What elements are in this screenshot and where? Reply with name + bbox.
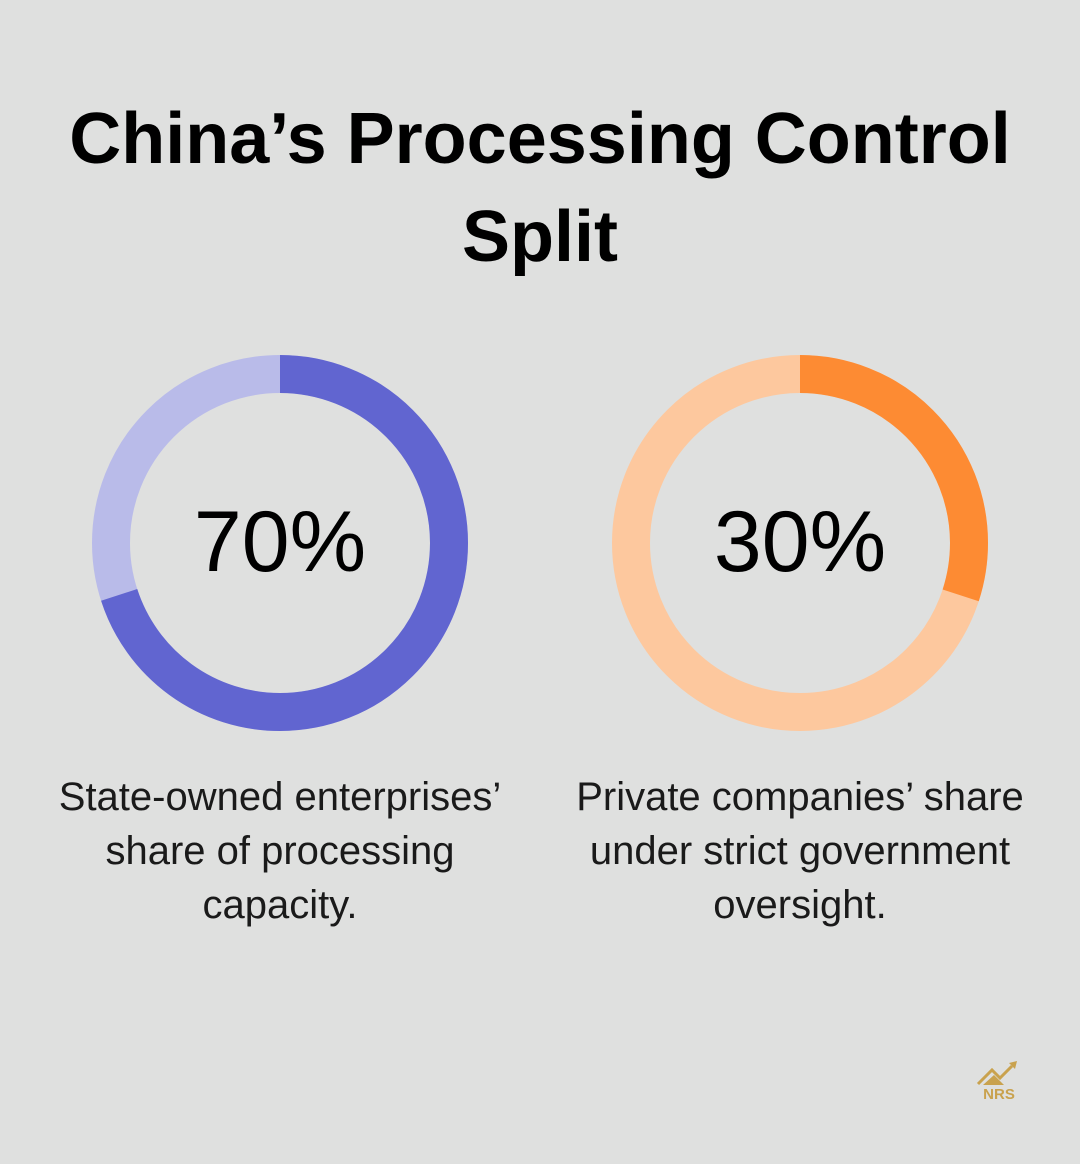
- title: Split: [462, 197, 618, 277]
- title: China’s Processing Control: [69, 99, 1011, 179]
- logo: NRS: [977, 1061, 1017, 1102]
- donut chart: private 30%: 30%: [714, 494, 886, 590]
- caption: state-owned: State-owned enterprises’ share of processing capacity.: [59, 775, 501, 927]
- title: [69, 99, 1011, 277]
- caption: private: Private companies’ share under strict government oversight.: [576, 775, 1024, 927]
- donut chart: state-owned 70%: 70%: [194, 494, 366, 590]
- donut chart: state-owned 70%: [92, 355, 468, 731]
- donut chart: private 30%: [612, 355, 988, 731]
